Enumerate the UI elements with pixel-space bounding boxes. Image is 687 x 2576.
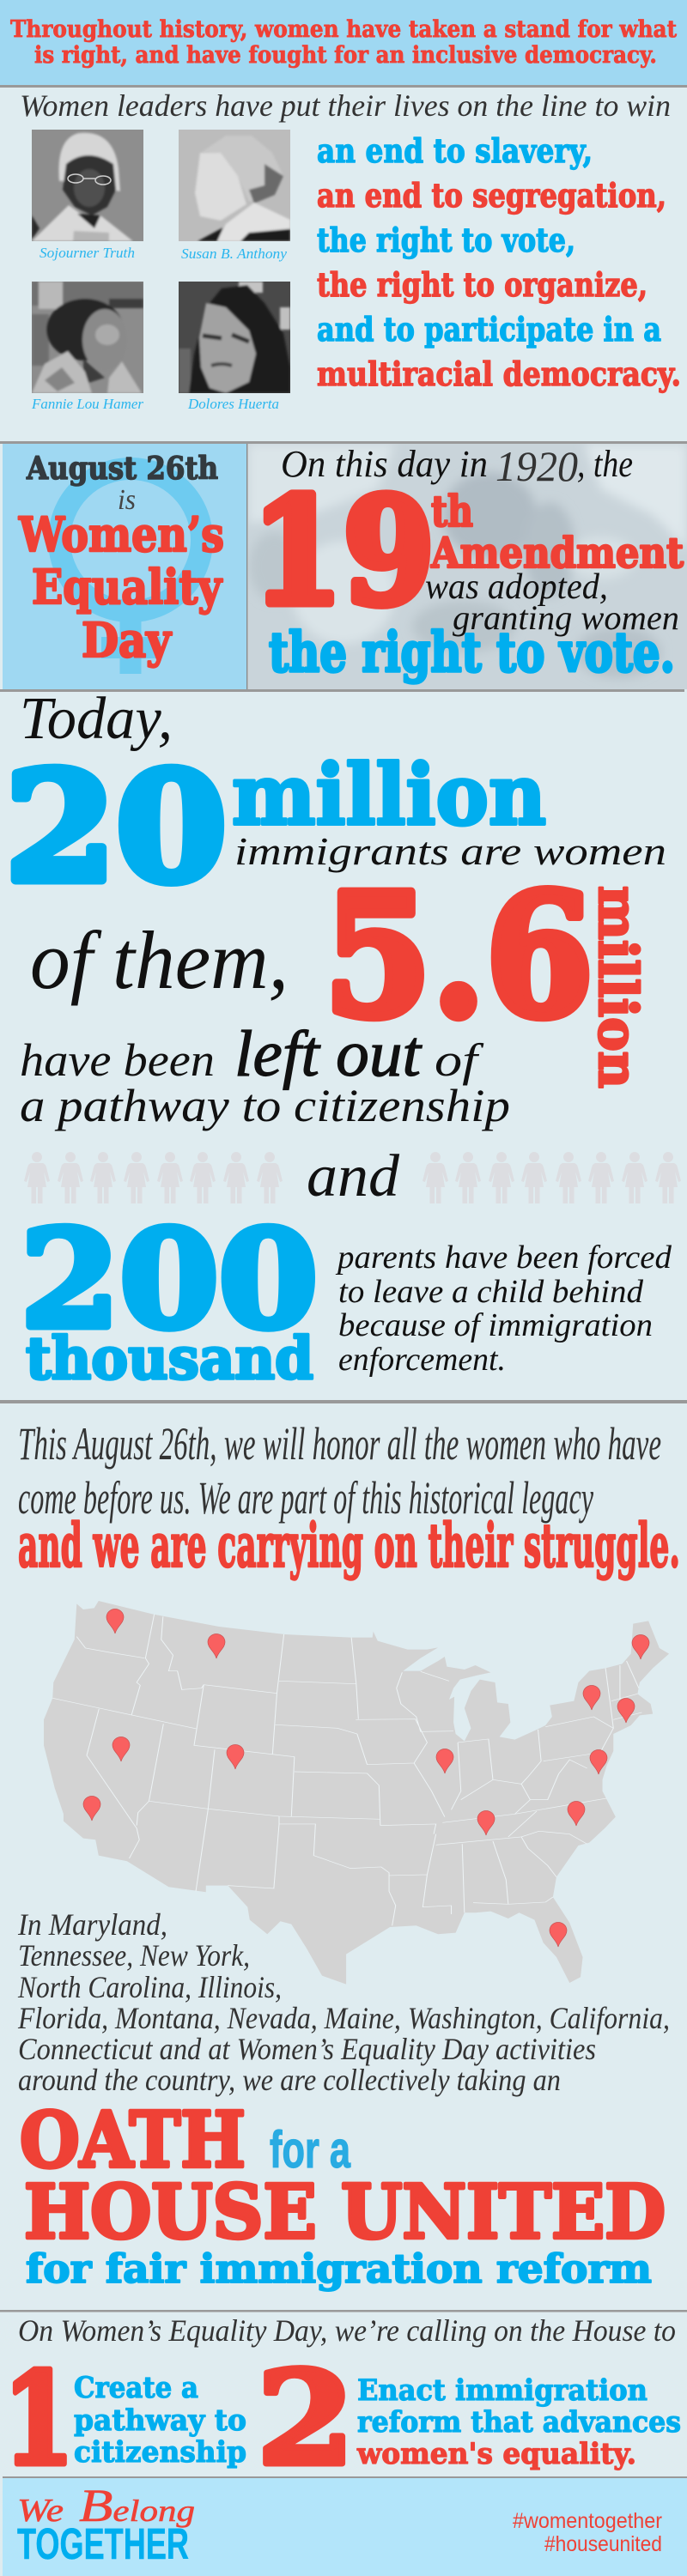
text: parents forced (335, 1240, 672, 1378)
logo: We Belong Together: TOGETHER (17, 2519, 189, 2568)
heading: oath for a house united: HOUSE UNITED (24, 2169, 666, 2256)
panel: August 26th: is (118, 484, 136, 516)
map: United States with pins (44, 1601, 669, 1985)
panel: 19th Amendment: 19 (252, 466, 435, 638)
item 1: create a pathway: citizenship (74, 2435, 246, 2470)
panel: 19th Amendment: was adopted, (425, 567, 608, 607)
item 1: create a pathway: Create a (74, 2371, 198, 2405)
panel: 19th Amendment: th (431, 486, 473, 536)
panel: legacy statement (18, 1418, 680, 1581)
text: left out of a pathway (20, 1018, 510, 1131)
text: on this day in 1920 (281, 442, 633, 490)
stat: 5.6 million: 5.6 (324, 858, 593, 1055)
stat: 200 thousand: thousand (26, 1324, 313, 1392)
heading: oath for a house united (20, 2094, 666, 2292)
hashtags (513, 2509, 662, 2556)
text: list of states: In Maryland, (17, 1907, 167, 1942)
photo: Susan B. Anthony (179, 130, 290, 241)
panel: 19th Amendment: granting women (453, 598, 679, 637)
logo: We Belong Together (17, 2480, 195, 2568)
hashtags: #womentogether (513, 2509, 662, 2533)
text: left out of a pathway: of (435, 1034, 484, 1086)
caption: Fannie Lou Hamer: Fannie Lou Hamer (31, 396, 143, 412)
panel: calls to the House (3, 2313, 681, 2494)
panel: August 26th: Women’s (18, 506, 224, 562)
pins (83, 1609, 649, 1947)
photo: Sojourner Truth (32, 130, 143, 241)
item 2: enact reform: 2 (257, 2343, 355, 2494)
text: of them: of them, (30, 914, 289, 1006)
text: parents forced: to leave a child behind (338, 1274, 644, 1310)
heading: oath for a house united: for a (270, 2121, 350, 2179)
text: and: and (307, 1143, 400, 1209)
icon: venus symbol (59, 469, 202, 674)
caption: Sojourner Truth: Sojourner Truth (40, 245, 135, 261)
item 2: enact reform: Enact immigration (357, 2373, 647, 2408)
text: parents forced: enforcement. (338, 1342, 506, 1378)
text: parents forced: because of immigration (338, 1307, 653, 1343)
logo: We Belong Together: Belong (79, 2480, 195, 2531)
heading: oath for a house united: for fair immigration reform (26, 2246, 652, 2292)
item 2: enact reform: women's equality. (356, 2437, 636, 2471)
stat: 200 thousand: 200 (21, 1201, 318, 1358)
item 1: create a pathway (3, 2344, 246, 2494)
caption: Susan B. Anthony: Susan B. Anthony (181, 245, 287, 262)
text: on this day in 1920: 1920 (495, 442, 578, 490)
text: list of states: Connecticut and at Women’s Equality Day activities (18, 2032, 596, 2066)
photo: Fannie Lou Hamer (32, 282, 143, 393)
heading: women leaders: Women leaders have put their lives on the line to win (20, 88, 671, 123)
item 1: create a pathway: pathway to (74, 2403, 246, 2438)
icons: women row left (24, 1152, 283, 1203)
panel: top banner (0, 0, 687, 88)
list: rights won (317, 131, 681, 393)
stat: 20 million: immigrants are women (234, 829, 666, 873)
item 1: create a pathway: 1 (3, 2344, 75, 2494)
heading: oath for a house united: OATH (20, 2094, 246, 2185)
panel: August 26th: Equality (32, 559, 223, 615)
panel: August 26th: Day (82, 612, 173, 668)
text: on this day in 1920: On this day in (281, 443, 488, 485)
stat: 20 million: million (232, 746, 546, 844)
text: on this day in 1920: , the (577, 443, 633, 485)
stat: 20 million (5, 740, 666, 916)
logo: We Belong Together: We (17, 2493, 64, 2529)
text: list of states: around the country, we are collectively taking an (18, 2063, 561, 2097)
list: rights won: the right to vote, (317, 221, 575, 259)
text: list of states (17, 1907, 670, 2097)
text: list of states: Tennessee, New York, (18, 1938, 250, 1973)
text: left out of a pathway: left out (234, 1018, 423, 1090)
text: left out of a pathway: a pathway to citizenship (20, 1080, 510, 1131)
panel: August 26th (3, 444, 246, 689)
panel: August 26th: August 26th (26, 451, 218, 487)
list: rights won: an end to slavery, (317, 131, 593, 170)
hashtags: #houseunited (544, 2532, 662, 2556)
stat: 20 million: 20 (5, 740, 227, 916)
panel: footer (3, 2476, 687, 2576)
panel: immigrant women statistics (5, 686, 681, 1392)
item 2: enact reform (257, 2343, 681, 2494)
caption: Dolores Huerta: Dolores Huerta (187, 396, 279, 412)
panel: women leaders (20, 88, 681, 412)
text: Today: Today, (20, 686, 173, 752)
panel: 19th Amendment (246, 442, 687, 689)
text: parents forced: parents have been forced (335, 1240, 672, 1276)
icons: women row right (423, 1152, 681, 1203)
photo: Dolores Huerta (179, 282, 290, 393)
stat: 5.6 million: million (587, 886, 649, 1088)
text: list of states: North Carolina, Illinois, (17, 1970, 282, 2004)
text: left out of a pathway: have been (20, 1034, 215, 1086)
